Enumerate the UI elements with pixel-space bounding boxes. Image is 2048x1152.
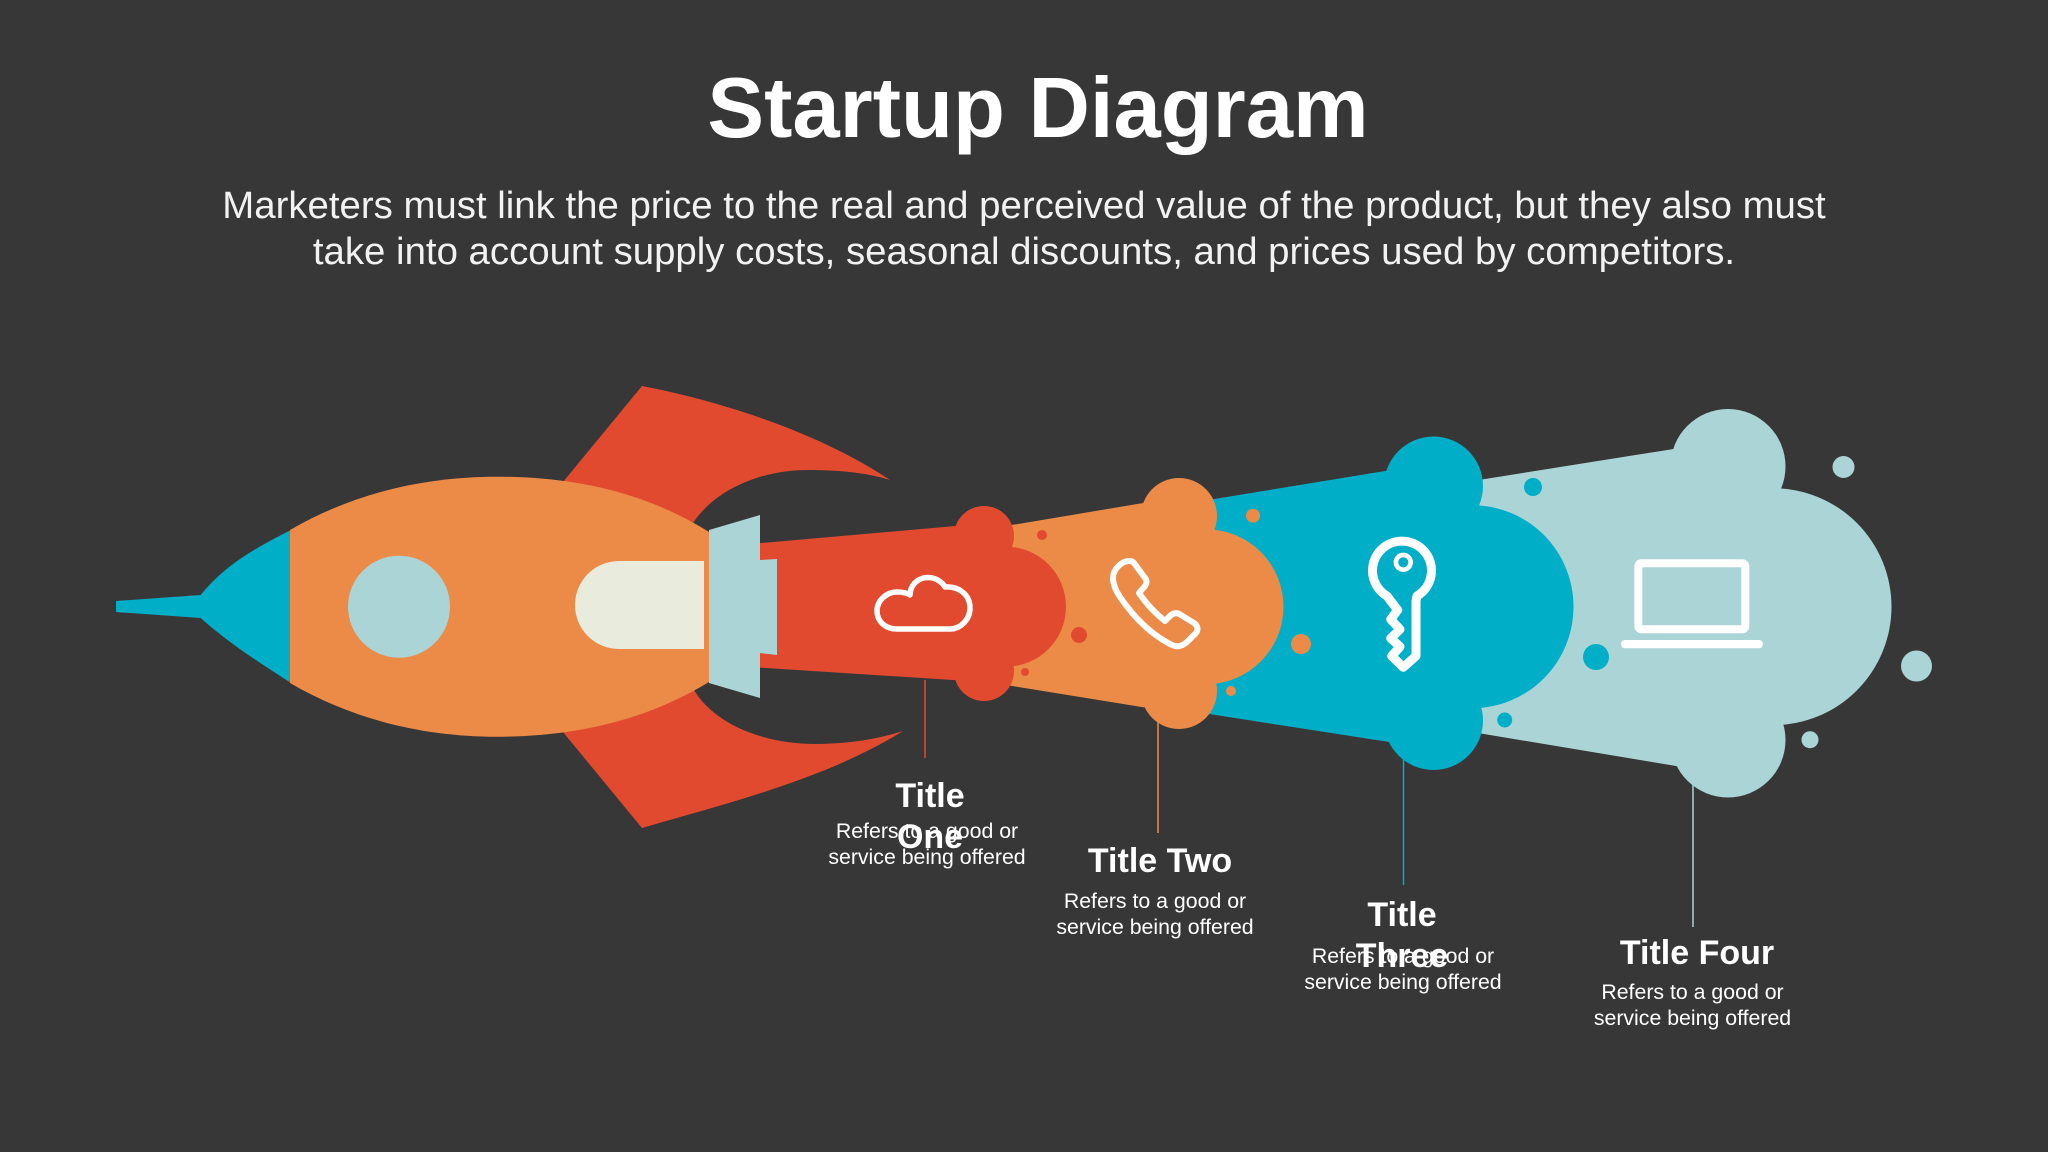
exhaust flame: red: [750, 506, 1066, 701]
icon: cloud: [877, 578, 970, 629]
label: title two: Refers to a good or: [1064, 889, 1246, 913]
rocket: [116, 386, 903, 828]
rocket top fin: [563, 386, 890, 550]
label: title two: service being offered: [1056, 915, 1254, 939]
particle dots: red: [1021, 530, 1087, 676]
exhaust cloud: orange: [1000, 478, 1284, 729]
rocket bottom fin: [563, 670, 903, 828]
label: title four: Refers to a good or: [1601, 980, 1784, 1004]
label: title one: Refers to a good or: [836, 819, 1018, 843]
label: title one: [828, 777, 1026, 869]
exhaust cloud: light blue: [1460, 409, 1892, 798]
rocket body: [290, 477, 709, 737]
label: title three: [1304, 896, 1502, 994]
label: title four: Title Four: [1620, 934, 1774, 972]
label: title three: Three: [1356, 937, 1448, 975]
exhaust cloud: cyan: [1190, 436, 1574, 770]
particle dots: light blue: [1802, 456, 1932, 748]
subtitle text block: Marketers must link the price to the real and perceived value of the product, but they also must: [222, 184, 1826, 227]
icon: laptop: [1621, 563, 1763, 648]
label: title one: service being offered: [828, 845, 1026, 869]
rocket hatch: [575, 561, 704, 649]
label: title three: Refers to a good or: [1312, 944, 1494, 968]
label: title four: service being offered: [1594, 1006, 1791, 1030]
label: title three: Title: [1367, 896, 1437, 934]
rocket nozzle: [709, 515, 777, 698]
label: title three: service being offered: [1304, 970, 1502, 994]
subtitle text block: [222, 184, 1826, 273]
rocket window: [348, 556, 450, 658]
icon: key: [1372, 541, 1431, 667]
particle dots: cyan: [1497, 478, 1609, 728]
leader lines: [925, 680, 1693, 927]
label: title one: One: [897, 818, 963, 856]
label: title one: Title: [895, 777, 965, 815]
label: title four: [1594, 934, 1791, 1030]
particle dots: orange: [1226, 509, 1311, 696]
subtitle text block: take into account supply costs, seasonal discounts, and prices used by competitors.: [313, 230, 1735, 273]
rocket nose: [116, 530, 291, 683]
title: Startup Diagram: [707, 61, 1369, 156]
label: title two: [1056, 842, 1254, 939]
icon: phone: [1113, 561, 1197, 646]
label: title two: Title Two: [1088, 842, 1232, 880]
